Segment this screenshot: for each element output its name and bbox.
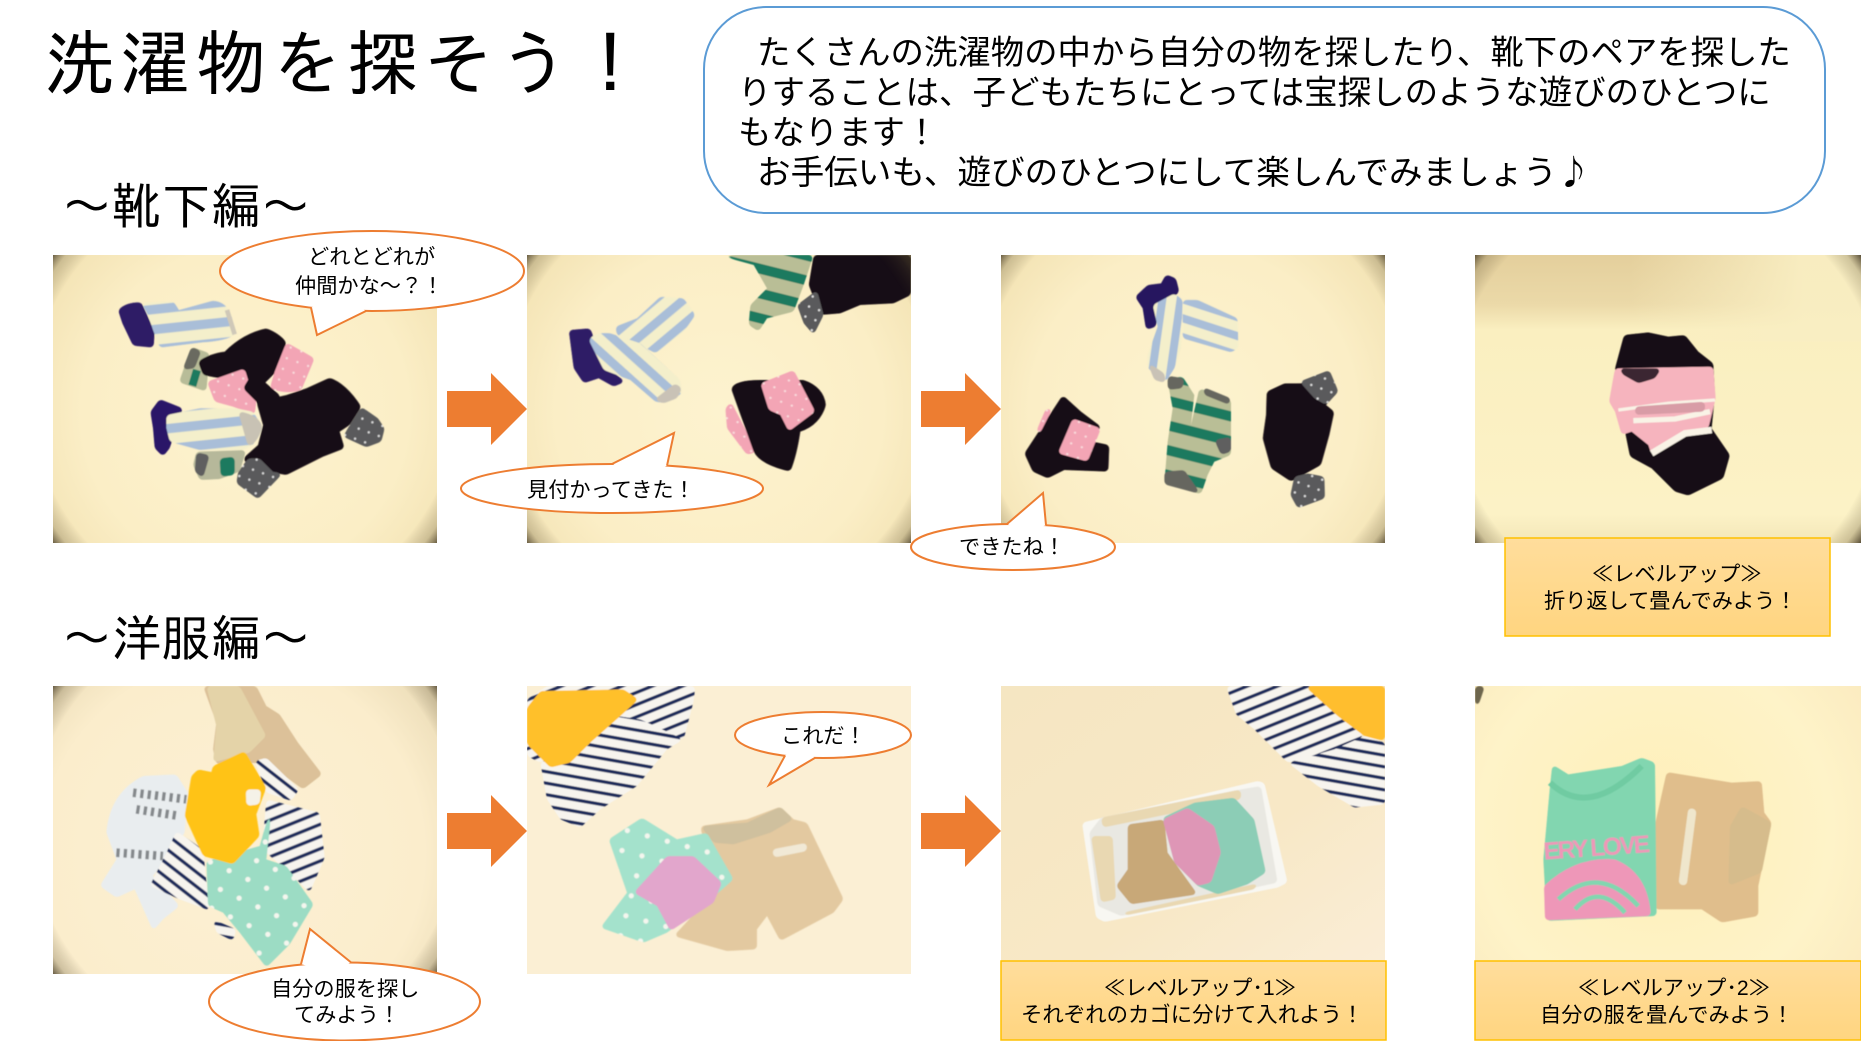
level-up box 1: sort into baskets: それぞれのカゴに分けて入れよう！ [1021, 1003, 1363, 1027]
callout: this one: これだ！ [781, 725, 866, 748]
photo: folded clothes: ERY LOVE [1543, 831, 1651, 866]
callout: done: できたね！ [959, 536, 1065, 559]
title: 洗濯物を探そう！ [44, 27, 650, 98]
callout: find your own clothes: 自分の服を探し [271, 977, 419, 1001]
photo: socks being sorted [527, 255, 911, 543]
callout: found some [461, 433, 763, 513]
arrow: socks step 1 to 2 [447, 373, 527, 445]
heading: socks section: ～靴下編～ [62, 180, 310, 230]
photo: folded sock [1475, 255, 1861, 543]
level-up box 2: fold your clothes [1475, 961, 1861, 1040]
callout: found some: 見付かってきた！ [527, 478, 695, 502]
photo: folded clothes [1475, 686, 1861, 961]
callout: which ones match: どれとどれが [308, 245, 435, 269]
panel: intro text box [704, 7, 1825, 213]
photo: socks paired [1001, 255, 1385, 543]
callout: which ones match [220, 231, 524, 335]
level-up box 1: sort into baskets: ≪レベルアップ･1≫ [1104, 977, 1296, 1000]
callout: find your own clothes [209, 929, 480, 1040]
level-up box: fold socks [1505, 538, 1830, 636]
level-up box 2: fold your clothes: 自分の服を畳んでみよう！ [1540, 1003, 1793, 1027]
level-up box: fold socks: ≪レベルアップ≫ [1592, 563, 1762, 586]
photo: clothes in basket [1001, 686, 1385, 961]
panel: intro text box: お手伝いも、遊びのひとつにして楽しんでみましょう♪ [757, 145, 1590, 194]
callout: this one [735, 712, 911, 785]
arrow: clothes step 2 to 3 [921, 795, 1001, 867]
callout: find your own clothes: てみよう！ [294, 1004, 400, 1027]
panel: intro text box: たくさんの洗濯物の中から自分の物を探したり、靴下のペアを探した [757, 35, 1791, 72]
arrow: clothes step 1 to 2 [447, 795, 527, 867]
callout: done [911, 493, 1115, 570]
level-up box 1: sort into baskets [1001, 961, 1386, 1040]
heading: clothes section: ～洋服編～ [62, 612, 310, 662]
arrow: socks step 2 to 3 [921, 373, 1001, 445]
photo: pile of clothes [53, 686, 437, 974]
panel: intro text box: りすることは、子どもたちにとっては宝探しのような遊びのひとつに [738, 75, 1771, 112]
callout: which ones match: 仲間かな～？！ [295, 274, 443, 298]
panel: intro text box: もなります！ [738, 115, 938, 152]
photo: shirt and shorts found [527, 686, 911, 974]
level-up box 2: fold your clothes: ≪レベルアップ･2≫ [1578, 977, 1770, 1000]
photo: pile of socks [53, 255, 437, 543]
level-up box: fold socks: 折り返して畳んでみよう！ [1544, 589, 1797, 613]
